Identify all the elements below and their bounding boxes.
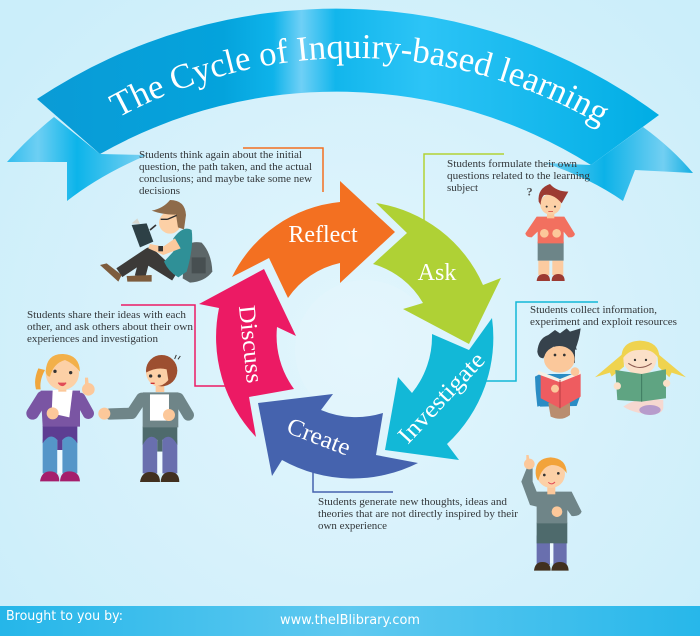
text: investigate: experiment and exploit resources bbox=[530, 316, 677, 328]
title: The Cycle of Inquiry-based learning bbox=[108, 35, 608, 130]
figure: girl reading bbox=[595, 341, 686, 415]
figure: girl discussing bbox=[33, 354, 95, 481]
connector: reflect bbox=[243, 148, 323, 192]
icon: question mark: ? bbox=[527, 185, 533, 199]
text: reflect: conclusions; and maybe take some new bbox=[139, 173, 312, 185]
arrow: ask bbox=[373, 203, 501, 344]
text: discuss: experiences and investigation bbox=[27, 333, 158, 345]
text: ask: questions related to the learning bbox=[447, 170, 591, 182]
connector: investigate bbox=[486, 302, 598, 381]
footer: website: www.theIBlibrary.com bbox=[280, 612, 420, 628]
footer bar bbox=[0, 606, 700, 636]
connector: discuss bbox=[121, 305, 226, 386]
arrow: reflect bbox=[232, 181, 395, 298]
figure: boy discussing bbox=[98, 355, 188, 482]
figure: boy reading bbox=[535, 328, 581, 419]
figure: student asking a question bbox=[525, 184, 575, 281]
text: reflect: decisions bbox=[139, 185, 180, 197]
text: create: own experience bbox=[318, 520, 387, 532]
connector: create bbox=[313, 470, 393, 492]
label: investigate: Investigate bbox=[393, 347, 491, 449]
text: ask: subject bbox=[447, 182, 478, 194]
title banner bbox=[7, 8, 693, 201]
text: discuss: Students share their ideas with each bbox=[27, 309, 186, 321]
text: create: theories that are not directly inspired by their bbox=[318, 508, 518, 520]
text: create: Students generate new thoughts, ideas and bbox=[318, 496, 507, 508]
figure: student reflecting with notebook bbox=[100, 200, 212, 283]
arrow: investigate bbox=[385, 318, 493, 460]
figure: student with raised hand bbox=[521, 455, 582, 571]
label: discuss: Discuss bbox=[233, 304, 267, 384]
connector: ask bbox=[424, 154, 504, 224]
text: investigate: Students collect information, bbox=[530, 304, 657, 316]
text: reflect: question, the path taken, and the actual bbox=[139, 161, 312, 173]
text: discuss: other, and ask others about their own bbox=[27, 321, 193, 333]
label: create: Create bbox=[283, 414, 354, 461]
footer: credit: Brought to you by: bbox=[6, 609, 123, 624]
label: reflect: Reflect bbox=[288, 222, 358, 248]
cycle diagram bbox=[199, 181, 501, 478]
text: reflect: Students think again about the initial bbox=[139, 149, 302, 161]
arrow: create bbox=[258, 394, 418, 478]
label: ask: Ask bbox=[418, 260, 456, 286]
arrow: discuss bbox=[199, 269, 296, 437]
text: ask: Students formulate their own bbox=[447, 158, 577, 170]
